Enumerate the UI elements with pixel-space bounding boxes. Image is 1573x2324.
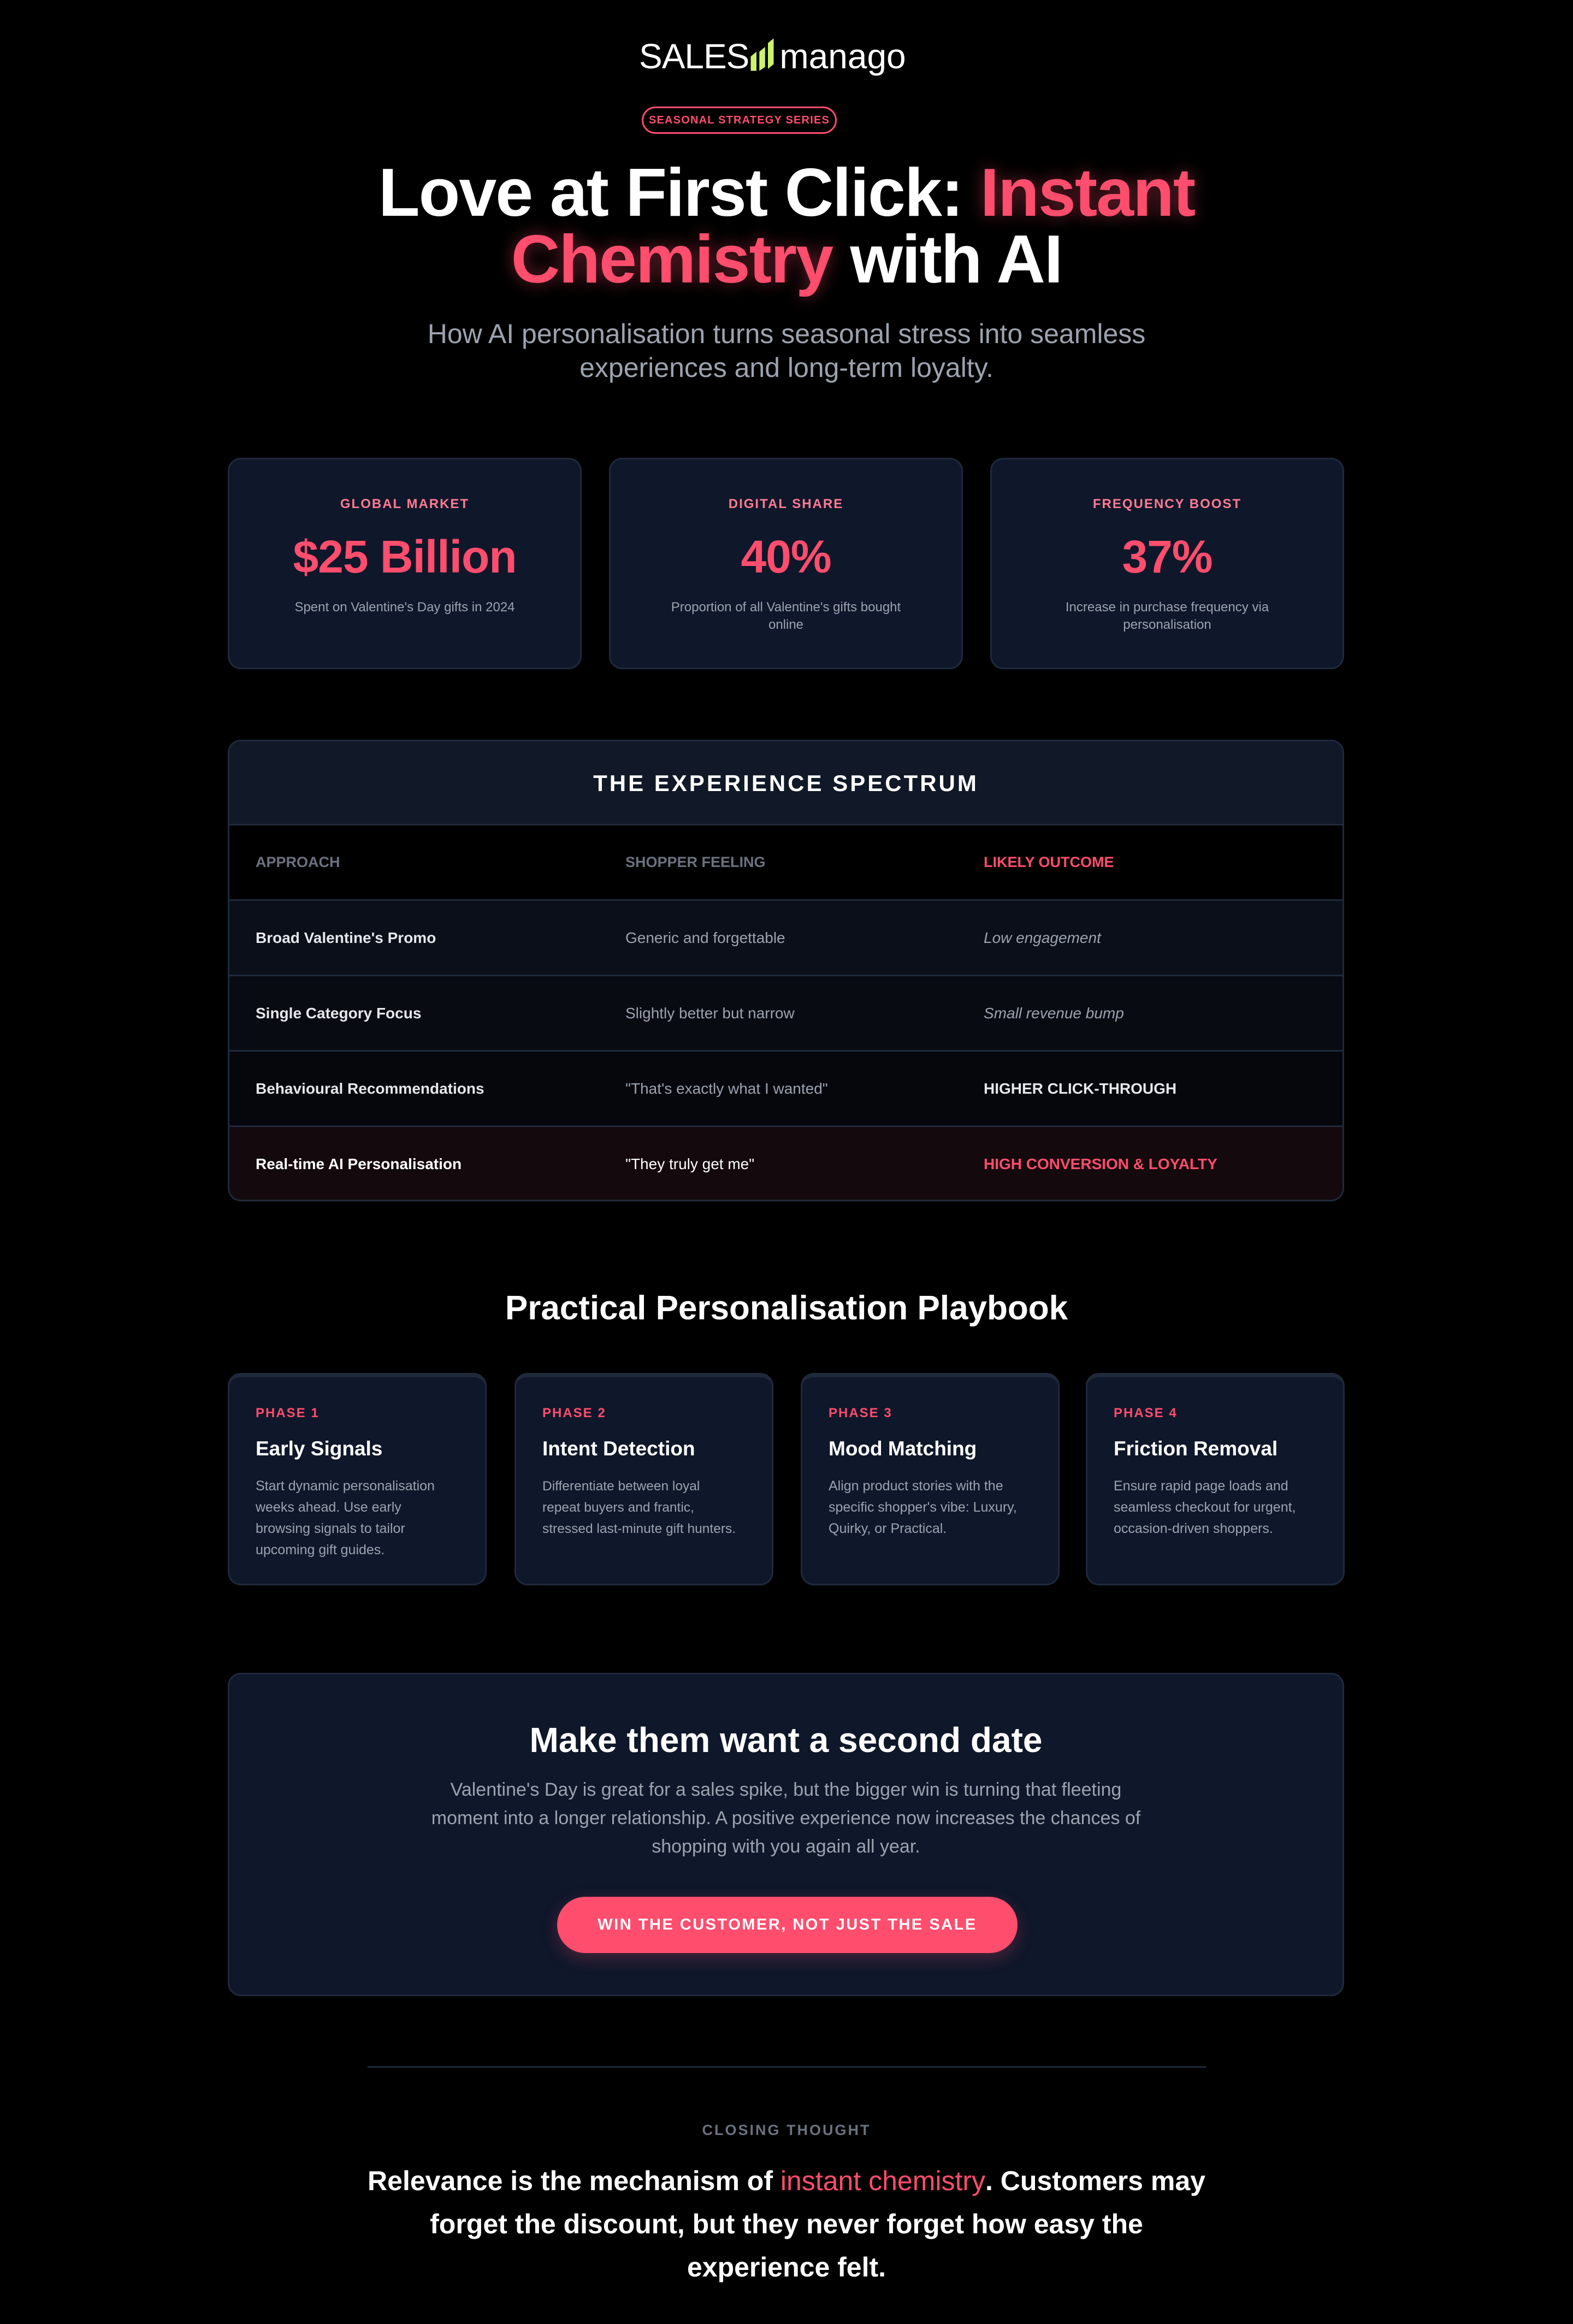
title: Chemistry with AI: [511, 222, 1062, 297]
phase 4 card: PHASE 4: [1114, 1406, 1178, 1420]
stat card: digital share: Proportion of all Valentine's gifts bought online: [671, 600, 901, 632]
row: behavioural: "That's exactly what I wanted": [625, 1080, 828, 1097]
phase 4 card: [1086, 1373, 1345, 1585]
subtitle: [428, 318, 1145, 383]
badge: seasonal strategy series: SEASONAL STRATEGY SERIES: [649, 114, 830, 126]
stat card: digital share: [609, 458, 963, 669]
phase 3 card: PHASE 3: [829, 1406, 892, 1420]
stat card: global market: Spent on Valentine's Day gifts in 2024: [294, 600, 515, 615]
row: single category: Slightly better but narrow: [625, 1005, 795, 1022]
stat card: frequency boost: [990, 458, 1344, 669]
row: broad promo: Generic and forgettable: [625, 929, 785, 946]
row: behavioural: Behavioural Recommendations: [256, 1080, 484, 1097]
CTA heading: Make them want a second date: [530, 1720, 1042, 1760]
row: single category: Small revenue bump: [984, 1005, 1124, 1022]
phase 2 card: PHASE 2: [542, 1406, 606, 1420]
phase 1 card: Start dynamic personalisation weeks ahead. Use early browsing signals to tailor upcoming gift guides.: [256, 1478, 435, 1558]
stat card: digital share: 40%: [741, 531, 831, 582]
phase 4 card: Ensure rapid page loads and seamless checkout for urgent, occasion-driven shoppers.: [1114, 1478, 1296, 1536]
phase 1 card: [228, 1373, 487, 1585]
title: Love at First Click: Instant: [379, 155, 1194, 231]
phase 2 card: [515, 1373, 773, 1585]
row: broad promo: Low engagement: [984, 929, 1101, 946]
phase 1 card: Early Signals: [256, 1437, 382, 1460]
row: real-time AI: Real-time AI Personalisation: [256, 1155, 462, 1172]
closing label: CLOSING THOUGHT: [702, 2122, 871, 2138]
stat card: frequency boost: Increase in purchase frequency via personalisation: [1066, 600, 1269, 632]
badge: seasonal strategy series: [642, 107, 837, 134]
table title: [229, 741, 1343, 825]
subtitle: experiences and long-term loyalty.: [579, 352, 994, 383]
subtitle: How AI personalisation turns seasonal stress into seamless: [428, 318, 1145, 349]
header row: LIKELY OUTCOME: [984, 854, 1114, 870]
row: behavioural: [229, 1050, 1343, 1125]
CTA text: Valentine's Day is great for a sales spike, but the bigger win is turning that fleeting moment into a longer relationship. A positive experience now increases the chances of shopping with you again all year.: [431, 1779, 1140, 1857]
table title: THE EXPERIENCE SPECTRUM: [593, 770, 979, 796]
CTA button: WIN THE CUSTOMER, NOT JUST THE SALE: [598, 1916, 977, 1933]
heading: playbook: Practical Personalisation Playbook: [505, 1289, 1068, 1327]
table: the experience spectrum: [228, 740, 1344, 1201]
row: behavioural: HIGHER CLICK-THROUGH: [984, 1080, 1176, 1097]
row: single category: [229, 975, 1343, 1050]
row: real-time AI: "They truly get me": [625, 1155, 754, 1172]
stat card: frequency boost: 37%: [1122, 531, 1213, 582]
title: [379, 155, 1202, 305]
header row: SHOPPER FEELING: [625, 854, 766, 870]
phase 2 card: Intent Detection: [542, 1437, 695, 1460]
phase 1 card: PHASE 1: [256, 1406, 320, 1420]
CTA button: [557, 1897, 1018, 1953]
stat card: global market: [228, 458, 582, 669]
phase 2 card: Differentiate between loyal: [542, 1479, 700, 1494]
row: real-time AI: [229, 1125, 1343, 1201]
logo: SALES manago: [639, 37, 906, 76]
closing statement: Relevance is the mechanism of instant chemistry. Customers may forget the discount, but they never forget how easy the experience felt.: [368, 2166, 1205, 2282]
phase 2 card: stressed last-minute gift hunters.: [542, 1521, 736, 1536]
stat card: global market: $25 Billion: [293, 531, 517, 582]
header row: [229, 824, 1343, 899]
row: single category: Single Category Focus: [256, 1005, 421, 1022]
CTA panel: [228, 1673, 1344, 1996]
row: broad promo: Broad Valentine's Promo: [256, 929, 436, 946]
stat card: global market: GLOBAL MARKET: [340, 497, 469, 511]
header row: APPROACH: [256, 854, 340, 870]
phase 4 card: Friction Removal: [1114, 1437, 1278, 1460]
stat card: digital share: DIGITAL SHARE: [729, 497, 843, 511]
stat card: frequency boost: FREQUENCY BOOST: [1093, 497, 1241, 511]
phase 3 card: [801, 1373, 1060, 1585]
phase 3 card: Align product stories with the specific shopper's vibe: Luxury, Quirky, or Practical.: [829, 1478, 1017, 1536]
phase 2 card: repeat buyers and frantic,: [542, 1500, 694, 1515]
row: real-time AI: HIGH CONVERSION & LOYALTY: [984, 1155, 1217, 1172]
row: broad promo: [229, 899, 1343, 975]
phase 3 card: Mood Matching: [829, 1437, 977, 1460]
